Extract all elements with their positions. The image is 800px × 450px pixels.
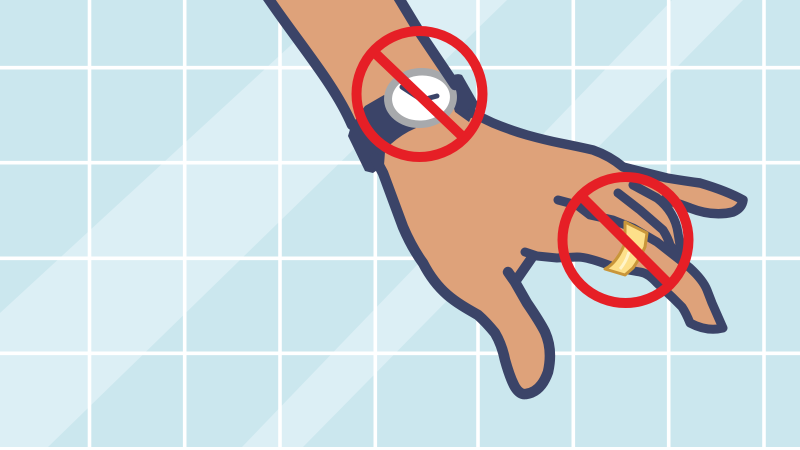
prohibition sign: ring (562, 177, 688, 303)
hand outline (266, 0, 743, 394)
hand and arm (266, 0, 743, 394)
skin fill (266, 0, 743, 394)
watch face (382, 65, 459, 131)
watch strap (348, 74, 478, 173)
prohibition sign: watch (356, 31, 482, 157)
wrist skin over strap (388, 112, 480, 180)
ring (605, 222, 647, 275)
